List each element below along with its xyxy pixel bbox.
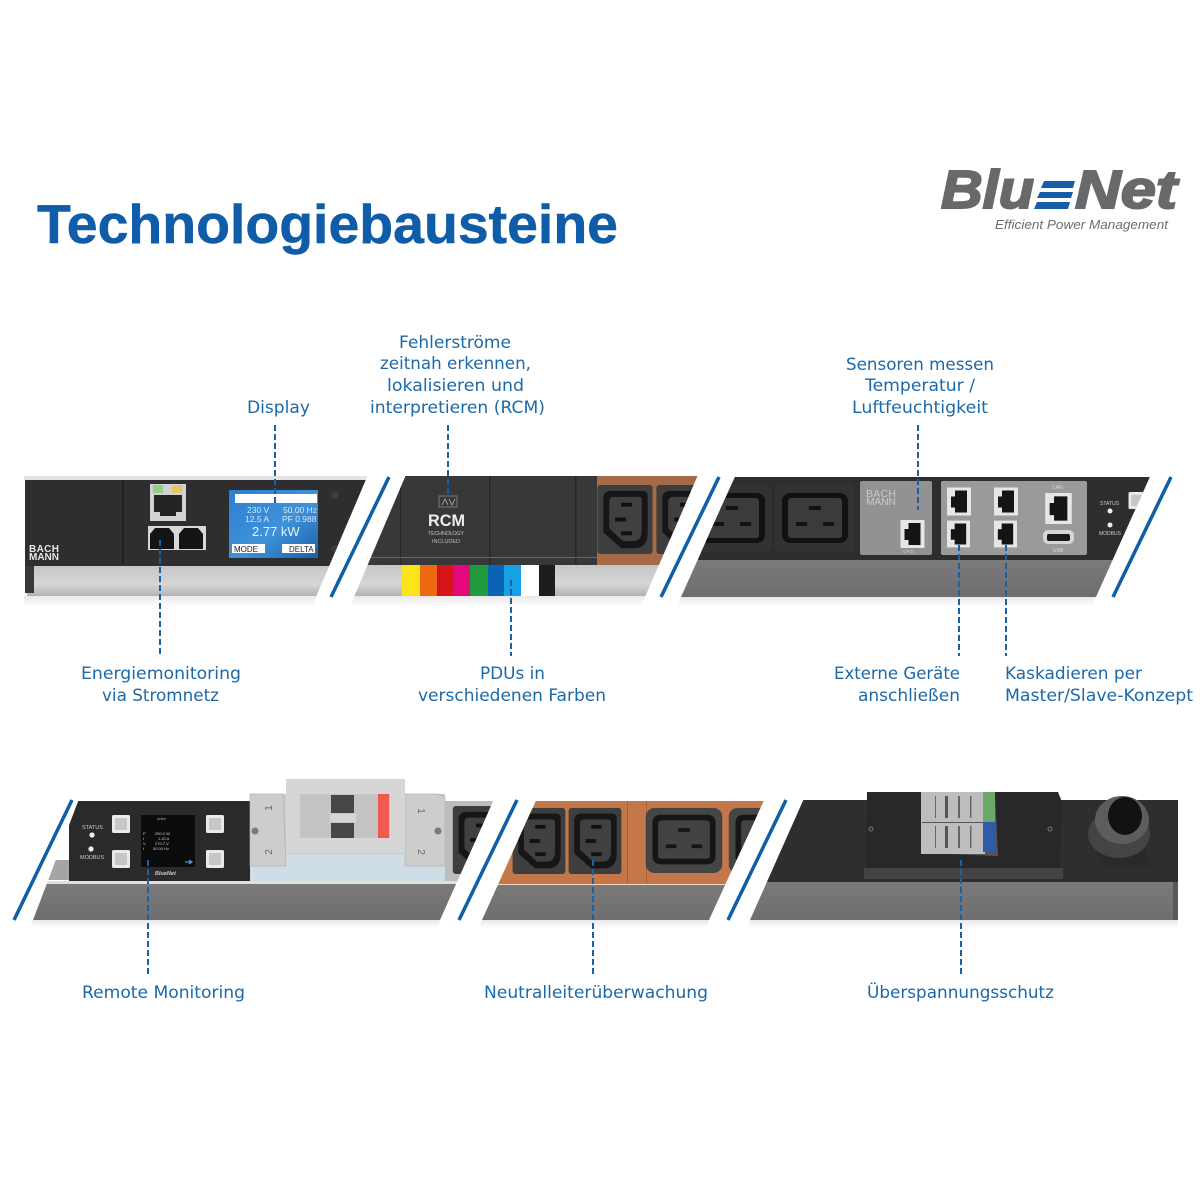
circuit breaker: 1	[415, 808, 426, 814]
display screen: 2.77 kW	[252, 524, 300, 539]
display screen: 230 V	[247, 505, 270, 515]
circuit breaker: 1	[264, 805, 275, 811]
callout: external devices: anschließen	[858, 686, 960, 705]
remote control panel: 1.20 A	[158, 836, 170, 841]
cable gland	[1088, 796, 1150, 858]
callout: external devices: Externe Geräte	[834, 664, 960, 683]
callout: energy monitoring: via Stromnetz	[102, 686, 219, 705]
remote control panel: 50.00 Hz	[153, 846, 169, 851]
remote control panel: 250.0 W	[155, 831, 170, 836]
slash divider 1	[331, 477, 389, 597]
PDU strip row 1, segment 3: ports	[676, 477, 1156, 606]
callout: external devices	[834, 545, 960, 705]
circuit breaker	[250, 779, 445, 881]
remote control panel: 270.7 V	[155, 841, 169, 846]
remote control panel: P	[143, 831, 146, 836]
network panel: LAN	[1053, 485, 1063, 491]
outlets	[513, 808, 565, 874]
slash divider 6	[728, 800, 786, 920]
colour variants	[402, 565, 555, 596]
callout: cascading: Kaskadieren per	[1005, 664, 1142, 683]
PDU strip row 1, segment 1: display	[24, 476, 377, 607]
callout: RCM: interpretieren (RCM)	[370, 398, 545, 417]
remote control panel	[80, 815, 224, 877]
status indicators: STATUS	[1100, 501, 1120, 507]
status indicators: MODBUS	[1099, 531, 1122, 537]
callout: PDU colours: verschiedenen Farben	[418, 686, 606, 705]
callout: RCM	[370, 333, 545, 497]
callout: neutral monitoring: Neutralleiterüberwachung	[484, 983, 708, 1002]
C19 outlets	[701, 484, 765, 552]
callout: sensors: Luftfeuchtigkeit	[852, 398, 989, 417]
remote control panel: STATUS	[82, 825, 103, 831]
LAN socket	[150, 484, 186, 521]
callout: energy monitoring: Energiemonitoring	[81, 664, 241, 683]
brand mark: BACH	[29, 544, 59, 555]
RCM badge: INCLUDED	[432, 539, 460, 545]
surge module	[864, 792, 1063, 879]
display screen: PF 0.988	[282, 514, 317, 524]
logo: BlueNet: Efficient Power Management	[995, 217, 1169, 232]
sensor panel	[860, 481, 932, 555]
callout: sensors: Temperatur /	[864, 376, 975, 395]
PDU strip row 1, segment 1: display: MANN	[29, 552, 59, 563]
remote control panel: BlueNet	[155, 871, 177, 877]
callout: remote monitoring: Remote Monitoring	[82, 983, 245, 1002]
C13 outlets	[597, 485, 653, 554]
logo: BlueNet: Net	[1075, 160, 1179, 220]
title: Technologiebausteine	[37, 193, 618, 255]
sensor panel: GPIO	[903, 549, 915, 554]
remote control panel: f	[143, 846, 145, 851]
slash divider 2	[661, 477, 719, 597]
sensor panel: BACH	[866, 488, 896, 500]
PDU strip row 2, segment 2: neutral monitoring	[480, 801, 764, 925]
PDU strip row 2, segment 3: surge protection	[746, 792, 1178, 928]
sensor panel: MANN	[866, 496, 896, 508]
RCM badge	[428, 496, 465, 545]
callout: sensors: Sensoren messen	[846, 355, 994, 374]
callout: PDU colours: PDUs in	[480, 664, 545, 683]
PDU strip row 1, segment 2: RCM and colours	[349, 476, 712, 606]
PDU strip row 2, segment 1: remote display and breaker	[29, 779, 510, 928]
callout: surge protection: Überspannungsschutz	[867, 983, 1054, 1002]
display screen	[229, 490, 318, 558]
RCM badge: TECHNOLOGY	[428, 531, 464, 537]
status indicators	[1099, 492, 1146, 537]
circuit breaker: 2	[415, 849, 426, 855]
slash divider 3	[1113, 477, 1171, 597]
display screen: DELTA	[289, 545, 314, 554]
callout: cascading	[1005, 545, 1194, 705]
remote control panel: I	[143, 836, 144, 841]
remote control panel: V	[143, 841, 146, 846]
remote control panel: active	[157, 817, 166, 821]
slash divider 5	[459, 800, 517, 920]
slash divider 4	[14, 800, 72, 920]
display screen: 12.5 A	[245, 514, 269, 524]
callout: Display: Display	[247, 398, 310, 417]
energy monitoring sockets	[148, 526, 206, 550]
logo: BlueNet: Blu	[941, 160, 1034, 220]
network panel	[941, 481, 1087, 555]
callout: energy monitoring	[81, 540, 241, 705]
callout: RCM: lokalisieren und	[387, 376, 524, 395]
callout: RCM: Fehlerströme	[399, 333, 511, 352]
callout: cascading: Master/Slave-Konzept	[1005, 686, 1194, 705]
display screen: 50.00 Hz	[283, 505, 317, 515]
network panel: USB	[1053, 548, 1064, 554]
callout: Display	[247, 398, 310, 505]
circuit breaker: 2	[264, 849, 275, 855]
remote control panel: MODBUS	[80, 855, 104, 861]
callout: RCM: zeitnah erkennen,	[380, 354, 531, 373]
logo: BlueNet	[941, 160, 1179, 232]
callout: sensors	[846, 355, 994, 510]
callout: PDU colours	[418, 580, 606, 705]
RCM badge: RCM	[428, 511, 465, 530]
display screen: MODE	[234, 545, 258, 554]
C13 outlet	[445, 801, 493, 881]
